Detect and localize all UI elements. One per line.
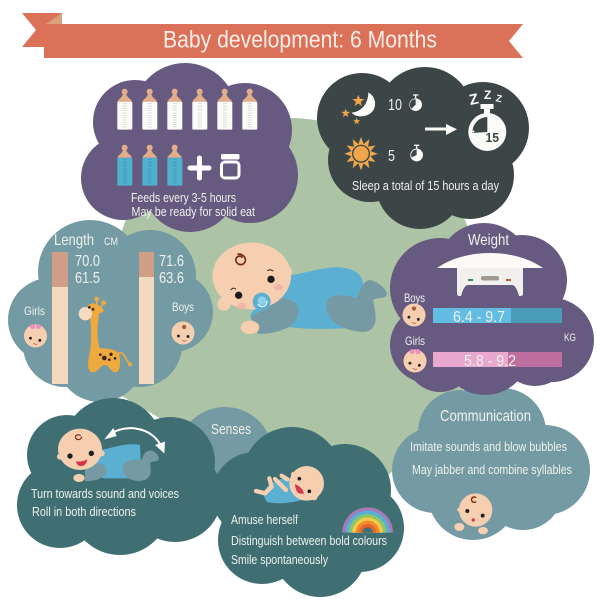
panel: feeding — [81, 63, 298, 232]
bar: girls weight: 5.8 - 9.2 — [464, 353, 516, 370]
weight labels — [404, 232, 576, 348]
icon: rolling baby — [57, 429, 159, 482]
panel: weight — [390, 223, 594, 395]
motor skills text — [31, 487, 179, 519]
icon: baby scale — [437, 253, 543, 296]
icon: sun — [344, 137, 378, 170]
senses text — [231, 513, 387, 567]
feeding text: May be ready for solid eat — [132, 205, 255, 219]
motor skills text: Turn towards sound and voices — [31, 487, 179, 501]
panel: length — [8, 220, 213, 402]
feeding text: Feeds every 3-5 hours — [131, 191, 236, 205]
icon: baby on back — [256, 466, 324, 503]
green background blob — [113, 118, 481, 500]
icon: sleeping Z letters: Z — [495, 93, 503, 105]
icon: moon and stars — [341, 92, 375, 124]
communication text: Communication — [440, 408, 531, 425]
length labels: 63.6 — [159, 270, 184, 287]
icon: peeking baby — [454, 493, 492, 534]
icon: giraffe — [79, 297, 132, 372]
panel: motor skills — [17, 398, 222, 555]
communication text: Imitate sounds and blow bubbles — [410, 440, 567, 454]
weight labels: KG — [564, 332, 576, 344]
length labels: 71.6 — [159, 253, 184, 270]
icon: small stopwatch 5 — [410, 145, 423, 161]
title banner: Baby development: 6 Months — [163, 26, 437, 54]
length labels: Girls — [24, 304, 45, 318]
sleep hour numbers: 10 — [388, 97, 402, 114]
icon: boy face — [402, 303, 426, 327]
length bar: girls — [52, 252, 68, 384]
senses text: Smile spontaneously — [231, 553, 329, 567]
icon: girl face — [24, 324, 47, 348]
icon: white bottles — [117, 89, 257, 130]
panel: senses tab — [177, 407, 273, 503]
weight labels: Weight — [468, 232, 509, 249]
title banner — [22, 13, 523, 58]
icon: boy face — [170, 320, 196, 346]
icon: double arrow — [104, 428, 165, 453]
motor skills text: Roll in both directions — [32, 505, 136, 519]
icon: small stopwatch 10 — [409, 95, 422, 111]
communication text — [410, 408, 572, 477]
length labels: Length — [54, 232, 94, 249]
panel: senses tab: Senses — [211, 421, 251, 438]
communication text: May jabber and combine syllables — [412, 463, 572, 477]
weight labels: Girls — [405, 334, 425, 348]
arrow — [425, 124, 457, 135]
sleep caption: Sleep a total of 15 hours a day — [352, 179, 500, 193]
weight labels: Boys — [404, 291, 425, 305]
senses text: Distinguish between bold colours — [231, 534, 387, 548]
length labels: 70.0 — [75, 253, 100, 270]
sleep hour numbers: 5 — [388, 148, 395, 165]
icon: plus — [190, 158, 209, 178]
bar: girls weight — [433, 352, 562, 370]
panel: communication — [392, 388, 590, 540]
icon: sleeping Z letters: Z — [468, 90, 480, 109]
icon: blue bottles — [117, 145, 182, 186]
senses text: Amuse herself — [231, 513, 298, 527]
bar: boys weight — [433, 308, 562, 326]
main crawling baby — [212, 243, 387, 334]
icon: sleeping Z letters: Z — [484, 88, 491, 102]
icon: girl face — [403, 349, 427, 373]
bar: boys weight: 6.4 - 9.7 — [453, 309, 505, 326]
length labels: Boys — [172, 300, 194, 314]
icon: large stopwatch: 15 — [486, 130, 499, 145]
length labels — [24, 232, 194, 318]
panel: senses — [212, 427, 404, 597]
sleep hour numbers — [388, 97, 402, 165]
icon: sleeping Z letters — [468, 88, 503, 109]
length labels: 61.5 — [75, 270, 100, 287]
length bar: boys — [139, 252, 154, 384]
length labels: CM — [104, 236, 118, 248]
icon: food jar — [221, 154, 240, 178]
feeding text — [131, 191, 255, 219]
icon: rainbow — [342, 507, 393, 533]
icon: large stopwatch — [468, 104, 506, 151]
panel: sleep — [317, 67, 529, 229]
